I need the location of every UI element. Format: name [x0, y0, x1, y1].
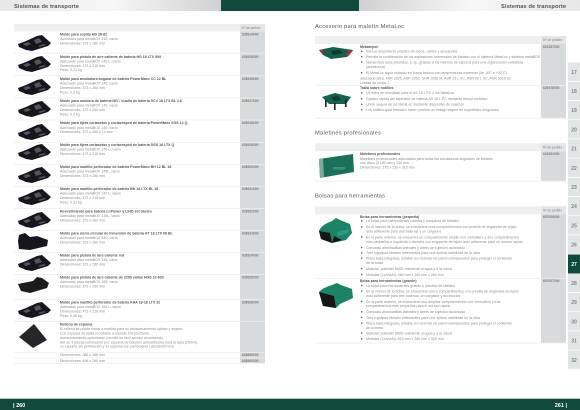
row: molde tijera SGS 12: Dimensiones: 373 x 260 x 10 mm — [60, 130, 113, 134]
row: revestimiento: Dimensiones: 373 x 260 mm — [60, 218, 105, 222]
row: martillo BH 18: 628921000 — [242, 187, 259, 191]
product: maletines text: Maletines profesionales adecuados para todas las amoladoras angulares de Metabo — [360, 157, 493, 161]
side index tabs: 24 — [571, 204, 577, 210]
icon: large tool bag — [319, 283, 353, 308]
page number left: | 260 — [13, 403, 25, 409]
row: sierra circular — [18, 232, 259, 250]
row: molde pistola aire caliente — [18, 55, 259, 72]
row: molde cizalla: Molde para nookora de batería NIV / cizalla de batería SCV 18 LTX BL 1.6 — [60, 99, 182, 103]
row: molde amoladora: Peso: 0,2 kg — [60, 90, 80, 94]
row: relleno de espuma — [19, 323, 259, 363]
product: metadepot: (accesorios) — [366, 65, 385, 69]
row: sierra circular: Molde para sierra circular de inmersión de batería KT 18 LTX 66 BL — [60, 232, 174, 236]
top header band, left page — [0, 0, 580, 11]
product: small bag: de la bolsa — [366, 261, 383, 265]
product: metadepot: El MetaLoc sigue estando en forma incluso con temperaturas extremas (de -40° a +90°C) — [366, 71, 507, 75]
order number column — [240, 32, 265, 363]
row: martillo BH 12: Dimensiones: 373 x 260 mm — [60, 174, 105, 178]
row: martillo KHA: Molde para martillo perforador de batería KHA 18-18 LTX 32 — [60, 301, 160, 305]
product: metadepot: Numerosos usos previstos, p. ej., gracias a los rellenos de espuma para una organización individual — [366, 60, 523, 64]
row: martillo KHA: Adecuado para metaBOX 165 L, vacío — [60, 305, 121, 309]
product: large bag: En el interior de la bolsa, se encuentran cinco compartimentos con presilla de enganche de tejido — [366, 289, 519, 293]
row: molde tijera SGS 12 — [18, 121, 259, 140]
footer band — [0, 398, 580, 410]
product: small bag: más pequeños a izquierda o derecha con enganche de tejido auto adherente para un acceso rápido — [366, 240, 523, 244]
side index tabs: 27 — [571, 262, 577, 268]
row: molde pistola aire caliente: Peso: 0,21 kg — [60, 68, 82, 72]
row: molde tijera SGS 12: Molde para tijera cortasetos y cortacésped de batería PowerMaxx SGS 12 Q — [60, 121, 188, 125]
row: sierra circular: Adecuado para metaBOX 340, vacío — [60, 236, 118, 240]
row: molde amoladora: Adecuado para metaBOX 145, vacío — [60, 82, 118, 86]
row: martillo BH 18: Dimensiones: 473 x 218 mm — [60, 196, 105, 200]
row: sierra circular: 628923000 — [242, 232, 259, 236]
product: large bag: auto adherente para tres baterías, un cargador y accesorios — [366, 294, 460, 298]
row: molde pistola aire caliente: Molde para pistola de aire caliente de batería HG 18 LTX 500 — [60, 55, 161, 59]
product: small bag — [319, 215, 560, 277]
product: small bag: Medidas (LxAnxAl): 460 mm x 260 mm x 260 mm — [366, 273, 444, 277]
row: relleno de espuma: 628899000 — [242, 353, 259, 357]
icon: wheeled board — [322, 93, 351, 110]
product: small bag: Cómodas almohadillas laterales y arnés de sujeción acolchado — [366, 246, 465, 250]
row: pistola aire caliente red: Molde para pistola de aire caliente red — [60, 253, 124, 257]
row: molde amoladora: 628916000 — [242, 77, 259, 81]
product: maletines text: 623451000 — [543, 152, 560, 156]
row: relleno de espuma: Relleno de espuma — [60, 323, 92, 327]
row: molde cizalla: Peso: 0,2 kg — [60, 112, 80, 116]
row: molde tijera SGS 18: Molde para tijera cortasetos y cortacésped de batería SGS 18 LTX Q — [60, 143, 175, 147]
row: pistola 2200 vatios: Molde para pistola de aire caliente de 2200 vatios HGS 22-630 — [60, 275, 164, 279]
row: molde amoladora — [18, 77, 259, 95]
row: molde tijera SGS 12: Adecuado para metaBOX 145, vacío — [60, 126, 118, 130]
icon: green case — [319, 154, 354, 178]
product: large bag: Cómodas almohadillas laterales y arnés de sujeción acolchado — [366, 310, 465, 314]
product: large bag: Bolsa para herramientas (grande) — [360, 279, 417, 283]
side index tabs: 26 — [571, 243, 577, 249]
row: pistola 2200 vatios: 628925000 — [242, 275, 259, 279]
row: molde tijera SGS 18: Adecuado para metaBOX 145 L, vacío — [60, 148, 121, 152]
row: relleno de espuma: Con espuma de rejilla recortable a medida 10x10x25mm — [60, 332, 149, 336]
row: pistola 2200 vatios: Dimensiones: 373 x 260 mm — [60, 284, 105, 288]
icon: green tray — [319, 47, 353, 59]
product: small bag: Placa base integrada, estable con listones de pared sobrepuestos para proteger el contenido — [366, 256, 512, 260]
product: tabla sobre rodillos: Tabla sobre rodillos — [360, 86, 393, 90]
side index tabs: 31 — [571, 339, 577, 345]
product: large bag — [319, 279, 560, 341]
row: pistola aire caliente red: Dimensiones: 373 x 260 mm — [60, 262, 105, 266]
product: small bag: Bolsa para herramientas (pequeña) — [360, 215, 419, 219]
product: metadepot: 621937000 — [543, 45, 560, 49]
row: molde amoladora: Molde para amoladora angular de batería PowerMaxx CC 12 BL — [60, 77, 167, 81]
row: molde pistola aire caliente: Adecuado para metaBOX 145 L, vacío — [60, 59, 121, 63]
side index tabs: 29 — [571, 300, 577, 306]
heading: bolsas para herramientas: Bolsas para herramientas — [315, 194, 385, 200]
row: revestimiento: Adecuado para metaBOX 145L, vacío — [60, 214, 120, 218]
side index tabs: 25 — [571, 223, 577, 229]
row: martillo KHA — [18, 301, 259, 318]
row: molde tijera SGS 12: 628918000 — [242, 121, 259, 125]
side index tabs: 17 — [571, 70, 577, 76]
row: molde cepillo: Molde para cepillo HD 26-82 — [60, 32, 107, 36]
product: maletines text: Maletines profesionales — [360, 152, 400, 156]
row: revestimiento: Revestimiento para batería Li-Power y LiHD set básico — [60, 209, 153, 213]
row: molde pistola aire caliente: 628915000 — [242, 55, 259, 59]
table header row — [14, 24, 265, 32]
row: relleno de espuma: Dimensiones: 496 x 266 mm — [60, 359, 105, 363]
product: small bag: Tres logotipos Metabo reflectantes para una óptima visibilidad en la obra — [366, 251, 480, 255]
table header row — [315, 36, 566, 44]
table header row — [315, 143, 566, 151]
panel: left product table — [14, 24, 265, 363]
row: pistola aire caliente red: 628924000 — [242, 253, 259, 257]
product: large bag: Placa base integrada, estable con listones de pared sobrepuestos para proteger el contenido — [366, 321, 512, 325]
row: martillo BH 12 — [18, 165, 259, 183]
product: metadepot: adecuado para: ASR 2025, ASR 2050, GHR 2050 M, ASR 25 L SC, ASR 50 L SC, ASR 5018 SC — [360, 76, 512, 80]
row: martillo BH 12: Adecuado para metaBOX 145L, vacío — [60, 170, 120, 174]
order number column — [541, 151, 566, 181]
product: metadepot: Para el alojamiento práctico de tubos, cables y accesorios — [366, 50, 458, 54]
side index tabs — [568, 62, 580, 369]
row: molde cizalla — [18, 99, 259, 117]
row: martillo KHA: 628926000 — [242, 301, 259, 305]
row: martillo BH 18 — [18, 187, 259, 205]
row: molde amoladora: Dimensiones: 373 x 260 mm — [60, 86, 105, 90]
row: pistola aire caliente red — [18, 253, 259, 271]
row: martillo BH 12: Molde para martillo perforador de batería PowerMaxx BH 12 BL 16 — [60, 165, 171, 169]
side index tabs: 19 — [571, 108, 577, 114]
row: molde pistola aire caliente: Dimensiones: 473 x 218 mm — [60, 64, 105, 68]
product: tabla sobre rodillos: Fijación rápida del aspirador de batería AS 18 L PC mediante tensor metálico — [366, 97, 487, 101]
row: relleno de espuma: Set de 4 piezas compuesto por: espuma de botones autoadhesiva para la tapa (25mm), — [60, 340, 198, 344]
row: relleno de espuma: Almacenamiento optimizado, permite un fácil acceso al contenido — [60, 336, 163, 340]
row dividers — [14, 53, 265, 363]
row: molde tijera SGS 18: 628919000 — [242, 143, 259, 147]
row: molde tijera SGS 18: Dimensiones: 473 x 218 mm — [60, 152, 105, 156]
product: metadepot: Metadepot — [360, 45, 379, 49]
table header row: Nº de pedido — [543, 208, 562, 212]
row: relleno de espuma: 628900000 — [242, 359, 259, 363]
product: tabla sobre rodillos — [322, 86, 560, 112]
row: pistola 2200 vatios — [18, 275, 259, 293]
product: small bag: auto adherente para dos baterías y un cargador — [366, 229, 442, 233]
side index tabs: 28 — [571, 281, 577, 287]
table header row: Nº de pedido — [242, 26, 261, 30]
product: tabla sobre rodillos: Unión segura de los MetaLoc mediante dispositivo de sujeción — [366, 103, 464, 107]
product: large bag: Tres logotipos Metabo reflectantes para una óptima visibilidad en la obra — [366, 316, 480, 320]
row: relleno de espuma: El relleno se puede cortar a medida para un almacenamiento óptimo y seguro. — [60, 327, 183, 331]
product: large bag: 657007000 — [543, 279, 560, 283]
side index tabs: 22 — [571, 166, 577, 172]
row: martillo BH 18: Molde para martillo perforador de batería BH 18 LTX BL 16 — [60, 187, 158, 191]
row: martillo KHA: Peso: 0,36 kg — [60, 314, 82, 318]
product: tabla sobre rodillos: Los rodillos-guía frenados hacen posible un trabajo seguro en superficies irregulares — [366, 108, 499, 112]
product: large bag: La bolsa para herramientas grande y práctica de Metabo — [366, 284, 455, 288]
row: molde cizalla: Dimensiones: 373 x 260 mm — [60, 108, 105, 112]
row: relleno de espuma: Dimensiones: 386 x 266 mm — [60, 353, 105, 357]
panel: bolsas table — [315, 206, 566, 343]
product: tabla sobre rodillos: Un extra en movilidad para el AS 18 L PC y los MetaLoc — [366, 91, 454, 95]
product: large bag: de la bolsa — [366, 326, 383, 330]
row: martillo BH 18: Adecuado para metaBOX 145 L, vacío — [60, 192, 121, 196]
side index tabs: 20 — [571, 127, 577, 133]
heading: left page section title: Sistemas de transporte — [14, 4, 79, 10]
product: metadepot: Permite la combinación de los aspiradores universales de Metabo con el sistema MetaLoc y sistema metaBOX — [366, 55, 541, 59]
order number column — [541, 44, 566, 118]
row: relleno de espuma: 1x espuma sin perforación y 2x espuma con perforación (18x16x20 mm) — [60, 345, 174, 349]
table header row: Nº de pedido — [543, 38, 562, 42]
row: pistola 2200 vatios: Adecuado para metaBOX 165, vacío — [60, 280, 118, 284]
row: molde cizalla: Adecuado para metaBOX 145, vacío — [60, 104, 118, 108]
product: small bag: En la parte anterior, se encuentra un compartimento amplio con cremallera y dos compartimentos — [366, 235, 519, 239]
product: metadepot — [319, 45, 560, 85]
row: martillo KHA: Dimensiones: 473 x 218 mm — [60, 309, 105, 313]
row: molde cepillo: Adecuado para metaBOX 215, vacío — [60, 37, 118, 41]
row: martillo BH 18: Peso: 0,31 kg — [60, 200, 82, 204]
product: tabla sobre rodillos: 629376000 — [543, 86, 560, 90]
row: molde tijera SGS 18 — [18, 143, 259, 160]
row: molde cizalla: 628917000 — [242, 99, 259, 103]
side index tabs: 23 — [571, 185, 577, 191]
panel: accesorio table — [315, 36, 566, 118]
row: molde cepillo: Dimensiones: 373 x 260 mm — [60, 41, 105, 45]
product: small bag: En el interior de la bolsa, se encuentran tres compartimentos con presilla de enganche de tejido — [366, 225, 516, 229]
product: metadepot: Unidad de venta: 1 — [360, 81, 390, 85]
row: pistola aire caliente red: Adecuado para metaBOX 145, vacío — [60, 258, 118, 262]
product: large bag: Material: poliéster 600D resistente al agua y a la rotura — [366, 331, 452, 335]
heading: maletines profesionales: Maletines profesionales — [315, 131, 381, 137]
product: maletines text — [360, 152, 560, 170]
row: revestimiento: 628922000 — [242, 209, 259, 213]
table header row: Nº de pedido — [543, 146, 562, 150]
panel: maletines table — [315, 143, 566, 181]
row: molde cepillo: 628914000 — [242, 32, 259, 36]
product: maletines text: Dimensiones: 175 x 130 x 315 mm — [360, 166, 415, 170]
row: molde cepillo — [18, 32, 259, 51]
product: large bag: compartimentos más pequeños para el acceso rápido — [366, 304, 450, 308]
side index tabs: 18 — [571, 89, 577, 95]
product: small bag: Material: poliéster 600D resistente al agua y a la rotura — [366, 267, 452, 271]
row: revestimiento — [18, 209, 259, 228]
product: small bag: 657006000 — [543, 215, 560, 219]
side index tabs: 30 — [571, 319, 577, 325]
heading: accesorio para maletin: Accesorio para maletín MetaLoc — [315, 24, 404, 30]
side index tabs: 21 — [571, 147, 577, 153]
product: large bag: En la parte anterior, se encuentran dos amplios compartimentos con cremallera y tres — [366, 300, 501, 304]
product: small bag: La bolsa para herramientas robusta y compacta de Metabo — [366, 219, 459, 223]
icon: small tool bag — [319, 218, 352, 243]
heading: right page section title: Sistemas de transporte — [501, 4, 566, 10]
page number right: 261 | — [555, 403, 567, 409]
product: large bag: Medidas (LxAnxAl): 610 mm x 280 mm x 325 mm — [366, 337, 444, 341]
product: maletines text: con disco Ø 180 mm y 230 mm — [360, 161, 409, 165]
order number column — [541, 214, 566, 343]
row: martillo BH 12: 628920000 — [242, 165, 259, 169]
row: sierra circular: Dimensiones: 373 x 260 mm — [60, 240, 105, 244]
side index tabs: 32 — [571, 358, 577, 364]
table header row — [315, 206, 566, 214]
